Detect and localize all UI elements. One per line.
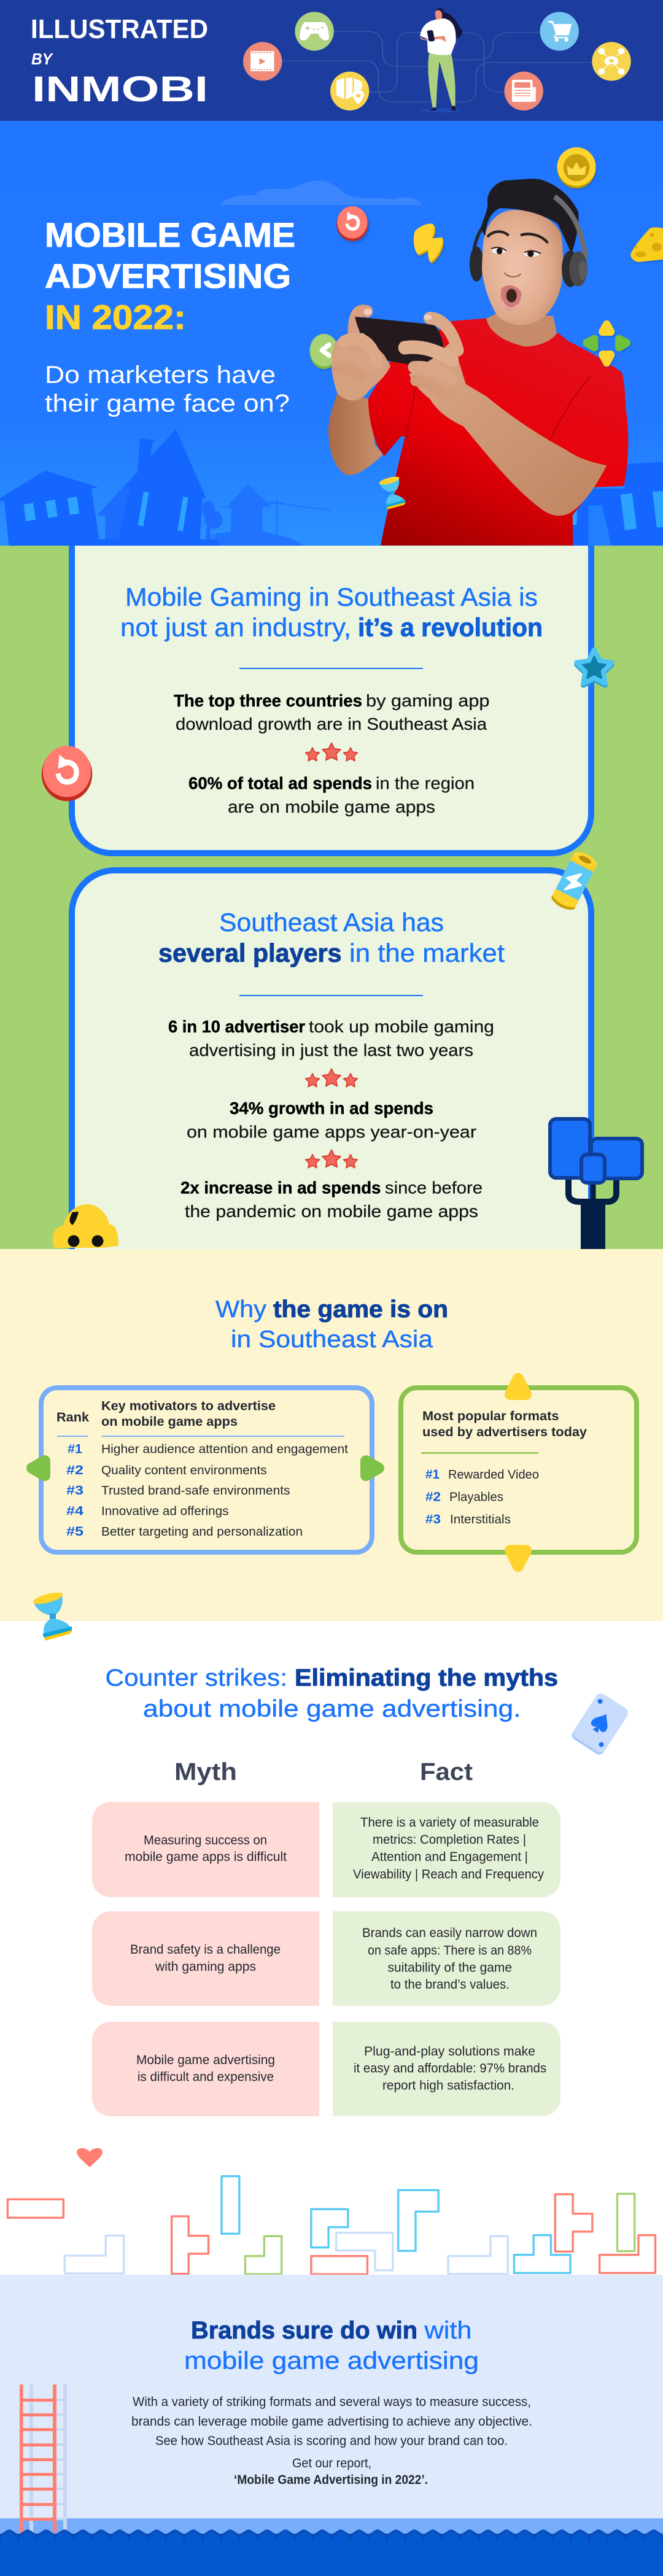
hero title: MOBILE GAME	[45, 215, 295, 254]
figure: woman using phone	[420, 8, 462, 112]
ranked list: #4	[66, 1504, 83, 1518]
logo: illustrated by InMobi	[31, 14, 208, 109]
panel: header banner	[0, 0, 663, 121]
heading: about mobile game advertising.	[143, 1696, 521, 1722]
heading: it’s a revolution	[358, 613, 543, 642]
row: measuring success: Attention and Engagement |	[371, 1849, 528, 1864]
row: brand safety: Brands can easily narrow down	[362, 1925, 537, 1940]
ranked list: Innovative ad offerings	[101, 1504, 228, 1518]
card: key motivators: Key motivators to advertise	[101, 1399, 276, 1413]
stat: 2x increase	[180, 1178, 483, 1221]
heading: Southeast Asia has	[219, 908, 444, 937]
card: popular formats: #3	[425, 1512, 441, 1526]
card: popular formats: Rewarded Video	[448, 1468, 539, 1482]
card: popular formats: Playables	[449, 1490, 503, 1504]
row: measuring success: Measuring success on	[144, 1833, 267, 1847]
row: brand safety: with gaming apps	[155, 1959, 256, 1974]
stat: 6 in 10 advertisers	[168, 1017, 494, 1059]
row: measuring success: There is a variety of measurable	[360, 1815, 539, 1830]
row: difficult and expensive: Mobile game advertising	[136, 2052, 275, 2067]
hero title: IN 2022:	[45, 298, 186, 336]
card: key motivators	[41, 1388, 372, 1552]
stat: top three countries: The top three countries	[174, 691, 362, 710]
card: key motivators: Rank	[56, 1410, 89, 1425]
ranked list: Trusted brand-safe environments	[101, 1483, 290, 1498]
heading	[120, 582, 543, 642]
hero title: ADVERTISING	[45, 257, 291, 295]
call to action: Get our report,	[292, 2456, 371, 2470]
left arm	[328, 393, 383, 475]
logo: illustrated by InMobi: ILLUSTRATED	[31, 14, 208, 44]
call to action: ‘Mobile Game Advertising in 2022’.	[234, 2473, 428, 2487]
logo: illustrated by InMobi: BY	[31, 50, 53, 68]
icon: playing card	[570, 1692, 630, 1757]
panel: myths and facts	[0, 1590, 663, 2275]
heading: in Southeast Asia	[231, 1326, 433, 1353]
icon: directional pad	[587, 325, 627, 363]
heading: Mobile Gaming in Southeast Asia is	[125, 582, 538, 611]
row: measuring success: Viewability | Reach and Frequency	[353, 1867, 544, 1882]
panel: brands win	[0, 2275, 663, 2576]
icon: red replay button	[336, 206, 368, 241]
ranked list: #5	[66, 1525, 83, 1539]
hero subtitle: their game face on?	[45, 390, 290, 417]
hero subtitle: Do marketers have	[45, 362, 276, 389]
headphone left cup	[470, 226, 484, 282]
row: brand safety	[92, 1911, 560, 2006]
card: popular formats: Interstitials	[450, 1512, 511, 1526]
headphones	[554, 197, 587, 287]
stat: 60 percent of ad spends: 60% of total ad spends	[188, 773, 372, 793]
stat: 2x increase: the pandemic on mobile game apps	[185, 1202, 478, 1221]
left hand thumb	[354, 311, 367, 333]
icon: game controller	[295, 12, 334, 51]
heading: Why	[215, 1296, 267, 1323]
card: key motivators: on mobile game apps	[101, 1415, 238, 1429]
illustration: tetris blocks	[7, 2176, 655, 2274]
icon: stars	[306, 1150, 357, 1168]
stat: top three countries	[174, 691, 490, 733]
icon: green back button	[310, 334, 338, 369]
stat: 34 percent growth: 34% growth in ad spends	[230, 1099, 433, 1118]
icon: map pin	[330, 72, 369, 110]
card: popular formats: Most popular formats	[422, 1409, 559, 1423]
heading: mobile game advertising	[184, 2347, 479, 2374]
column labels: Myth	[174, 1758, 237, 1785]
head	[482, 210, 563, 325]
heading: several players	[158, 938, 341, 967]
phone	[355, 317, 443, 364]
icon: tree	[550, 1119, 642, 1249]
row: measuring success	[92, 1802, 560, 1897]
stat: 34 percent growth	[187, 1099, 476, 1142]
stat: 60 percent of ad spends: in the region	[376, 773, 475, 793]
row: difficult and expensive	[92, 2022, 560, 2116]
ranked list: #3	[66, 1483, 83, 1498]
heading: Brands sure do win	[191, 2317, 417, 2344]
ranked list: Higher audience attention and engagement	[101, 1442, 348, 1456]
background: houses right	[570, 462, 663, 546]
heading	[106, 1665, 558, 1722]
stat: 2x increase: since before	[385, 1178, 483, 1197]
card: popular formats: #2	[425, 1490, 441, 1504]
neck	[486, 311, 557, 347]
hair	[481, 179, 578, 254]
card: revolution	[72, 546, 591, 853]
row: measuring success: metrics: Completion Rates |	[373, 1832, 526, 1847]
icon: ladder shadow	[29, 2385, 67, 2532]
column labels	[174, 1758, 473, 1785]
icon: video	[243, 42, 282, 81]
card: several players	[72, 870, 591, 1249]
water band	[0, 2518, 663, 2537]
call to action	[234, 2456, 428, 2487]
body text: See how Southeast Asia is scoring and how your brand can too.	[155, 2434, 508, 2448]
row: difficult and expensive: is difficult and expensive	[138, 2070, 274, 2084]
icon: red replay button	[42, 746, 92, 801]
row: brand safety: on safe apps: There is an 88%	[368, 1943, 532, 1958]
heading	[215, 1296, 448, 1353]
card: popular formats	[401, 1388, 637, 1552]
icon: heart	[77, 2148, 103, 2167]
hero subtitle	[45, 362, 290, 417]
icon: arrows around cards	[32, 1379, 526, 1566]
heading: the game is on	[273, 1296, 448, 1323]
stat: 6 in 10 advertisers: 6 in 10 advertiser	[168, 1017, 305, 1036]
ranked list	[66, 1442, 348, 1539]
icon: hourglass	[378, 475, 406, 509]
right arm and hand	[405, 314, 607, 516]
row: brand safety: Brand safety is a challenge	[130, 1942, 281, 1957]
heading: Eliminating the myths	[295, 1665, 558, 1691]
icon: battery	[549, 849, 599, 913]
heading	[184, 2317, 479, 2374]
row: difficult and expensive: report high satisfaction.	[382, 2078, 514, 2093]
stat: top three countries: by gaming app	[366, 691, 490, 710]
icon: blue star	[576, 650, 612, 685]
stat: top three countries: download growth are in Southeast Asia	[176, 714, 487, 733]
icon: ladder	[20, 2385, 56, 2532]
ranked list: Quality content environments	[101, 1463, 266, 1477]
figure: boy playing on phone with floating game items	[310, 147, 663, 546]
heading: Counter strikes:	[106, 1665, 287, 1691]
illustration: woman with connected app icons	[243, 8, 631, 112]
panel: hero	[0, 121, 663, 546]
body text	[131, 2395, 532, 2448]
ranked list: #1	[68, 1442, 82, 1456]
icon: lightning bolt	[414, 223, 444, 264]
icon: cheese	[630, 227, 663, 262]
icon: hourglass	[32, 1590, 72, 1641]
stat: 34 percent growth: on mobile game apps year-on-year	[187, 1123, 476, 1142]
stat: 60 percent of ad spends	[188, 773, 475, 816]
stat: 6 in 10 advertisers: took up mobile gaming	[309, 1017, 494, 1036]
left hand	[332, 309, 390, 401]
card: popular formats: used by advertisers today	[422, 1425, 587, 1439]
icon: newspaper	[504, 72, 543, 110]
card: popular formats: #1	[425, 1468, 440, 1482]
ranked list: #2	[66, 1463, 83, 1477]
water waves	[0, 2528, 663, 2576]
row: difficult and expensive: it easy and affordable: 97% brands	[354, 2060, 546, 2075]
logo: illustrated by InMobi: INMOBI	[32, 69, 208, 109]
stat: 60 percent of ad spends: are on mobile game apps	[228, 797, 435, 816]
stat: 6 in 10 advertisers: advertising in just the last two years	[189, 1041, 473, 1059]
panel: green section	[0, 546, 663, 1249]
background: cloud	[220, 180, 422, 205]
hero title	[45, 222, 295, 330]
icon: shopping cart	[540, 12, 579, 51]
row: brand safety: suitability of the game	[388, 1960, 512, 1975]
icon: yellow car	[53, 1204, 118, 1248]
body text: brands can leverage mobile game advertising to achieve any objective.	[131, 2415, 532, 2429]
column labels: Fact	[420, 1758, 473, 1785]
icon: network	[592, 42, 631, 81]
heading	[158, 908, 505, 967]
icon: stars	[306, 743, 357, 761]
stat: 2x increase: 2x increase in ad spends	[180, 1178, 381, 1197]
shirt	[368, 318, 628, 546]
row: brand safety: to the brand’s values.	[390, 1977, 510, 1992]
panel: why the game is on	[0, 1249, 663, 1621]
ranked list: Better targeting and personalization	[101, 1525, 303, 1539]
body text: With a variety of striking formats and several ways to measure success,	[133, 2395, 531, 2409]
icon: stars	[306, 1069, 357, 1087]
row: difficult and expensive: Plug-and-play solutions make	[364, 2044, 535, 2059]
row: measuring success: mobile game apps is difficult	[125, 1849, 287, 1864]
background: houses left	[0, 429, 332, 546]
icon: crown coin	[557, 147, 596, 188]
heading: with	[424, 2317, 471, 2344]
heading: in the market	[349, 938, 505, 967]
face details	[488, 231, 547, 311]
heading: not just an industry,	[120, 613, 351, 642]
